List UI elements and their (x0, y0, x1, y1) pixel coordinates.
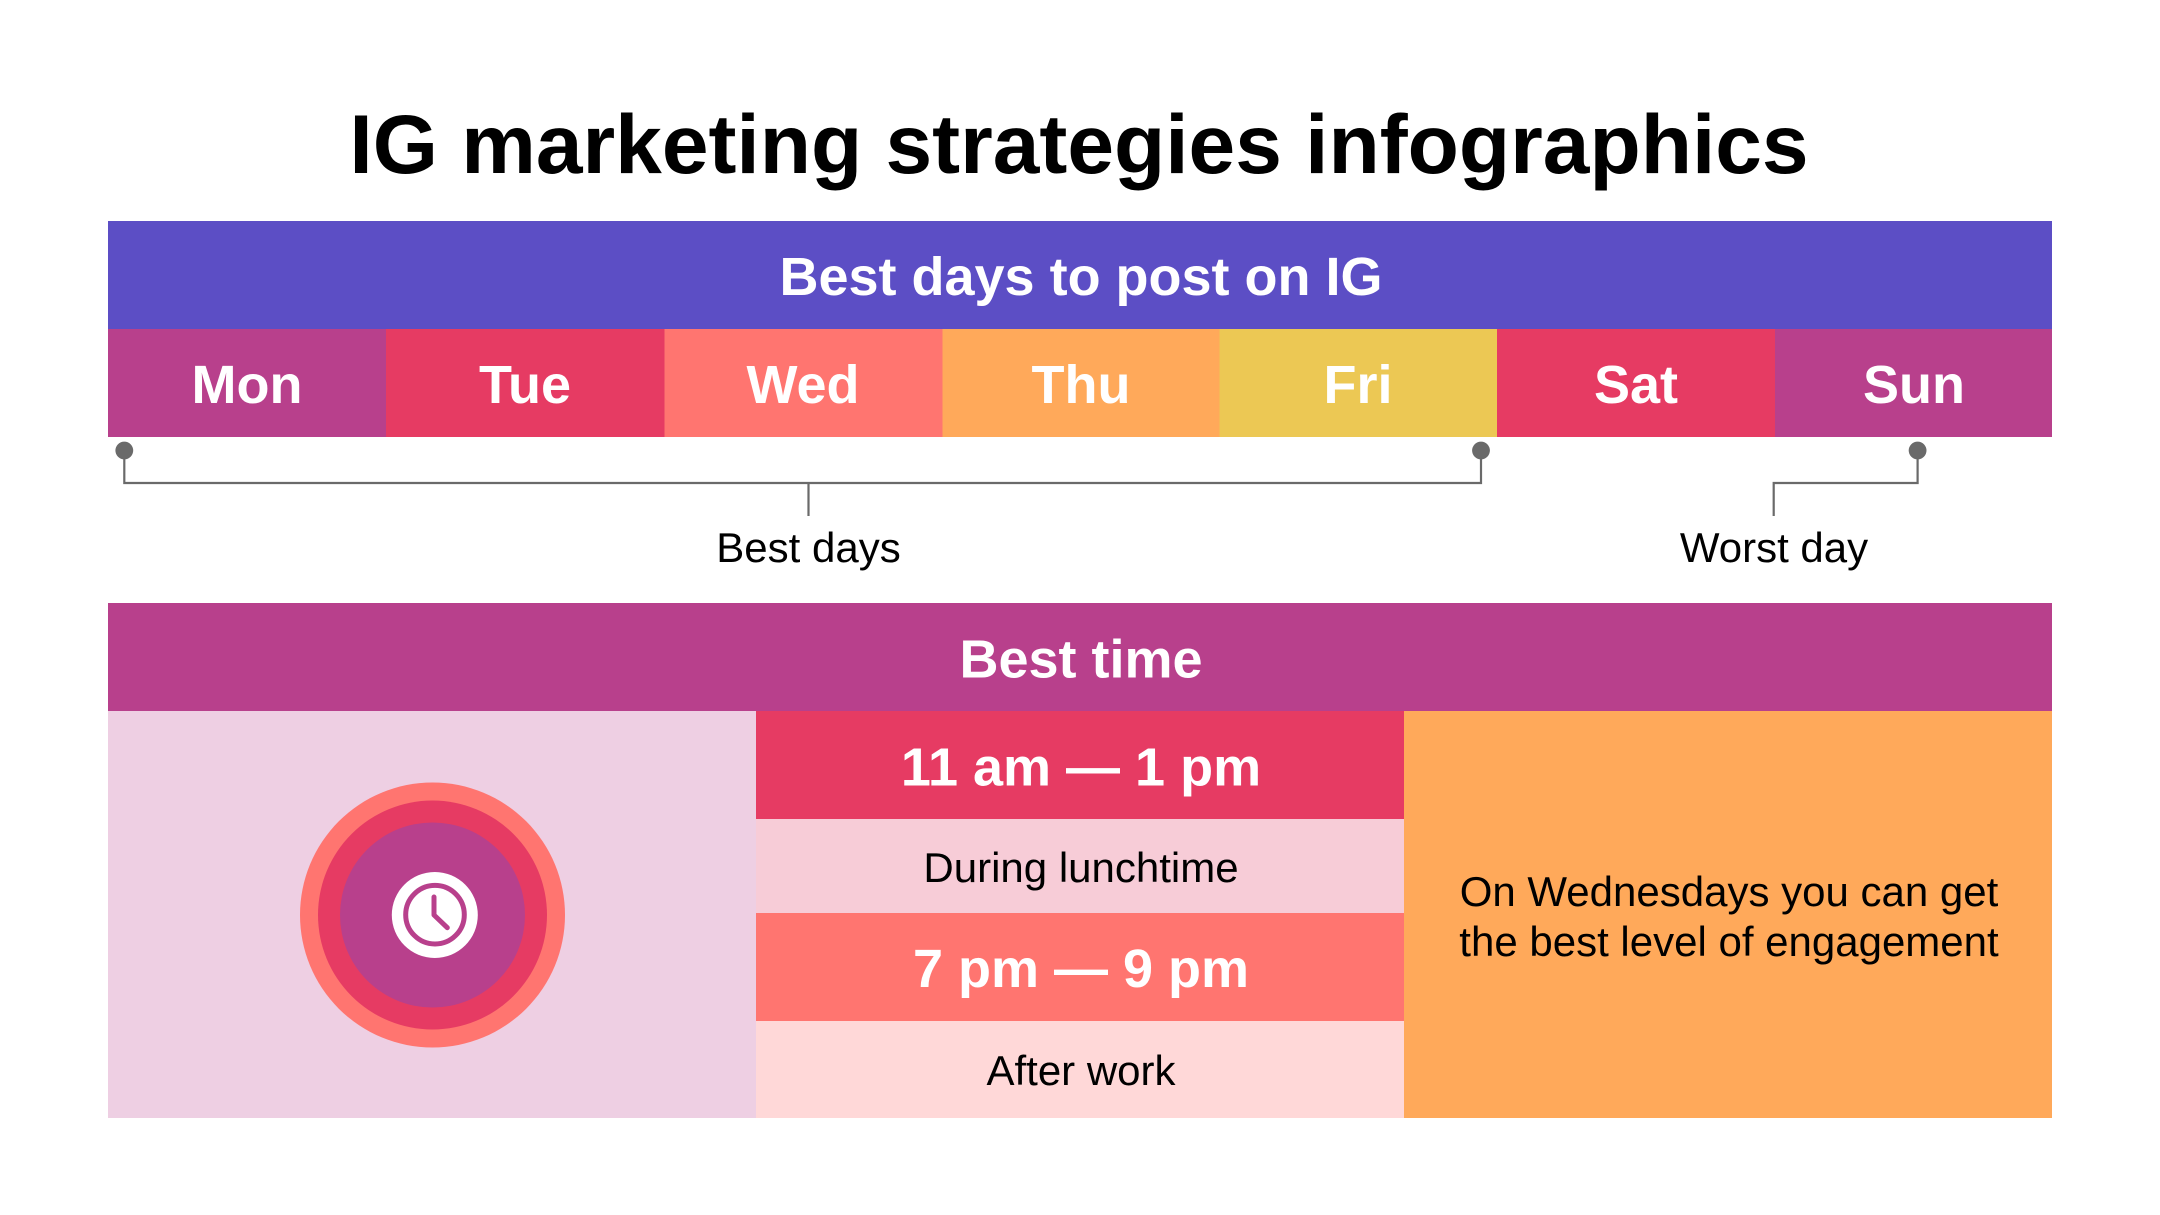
title: IG marketing strategies infographics (349, 97, 1809, 191)
icon: clock in concentric circles (300, 782, 565, 1048)
day: Mon (108, 329, 386, 437)
heading band: best days to post (108, 221, 2052, 329)
day: Wed (664, 329, 942, 437)
label: best days: Best days (716, 524, 901, 571)
panel: clock background (108, 711, 756, 1118)
day: Tue: Tue (479, 355, 571, 415)
note: after work (756, 1021, 1404, 1118)
bracket: best days (115, 442, 1490, 516)
callout: wednesday engagement (1404, 711, 2052, 1118)
label: worst day: Worst day (1680, 524, 1868, 571)
day: Thu: Thu (1032, 355, 1130, 415)
time block: 7 pm to 9 pm (756, 913, 1404, 1021)
callout: wednesday engagement: On Wednesdays you can get (1460, 868, 1999, 915)
heading band: best time: Best time (959, 630, 1203, 690)
day: Sat (1497, 329, 1775, 437)
day: Sat: Sat (1594, 355, 1678, 415)
note: during lunchtime: During lunchtime (923, 844, 1239, 891)
time block: 11 am to 1 pm (756, 711, 1404, 819)
note: during lunchtime (756, 819, 1404, 913)
note: after work: After work (986, 1047, 1177, 1094)
day: Wed: Wed (746, 355, 860, 415)
day: Fri (1220, 329, 1497, 437)
day: Sun: Sun (1863, 355, 1965, 415)
bracket: worst day (1774, 442, 1926, 516)
day: Mon: Mon (192, 355, 302, 415)
day: Sun (1775, 329, 2052, 437)
time block: 7 pm to 9 pm: 7 pm — 9 pm (913, 939, 1249, 999)
day: Fri: Fri (1323, 355, 1393, 415)
panel: best days (108, 221, 2052, 571)
time block: 11 am to 1 pm: 11 am — 1 pm (901, 738, 1261, 798)
heading band: best time (108, 603, 2052, 711)
day: Thu (942, 329, 1220, 437)
callout: wednesday engagement: the best level of engagement (1459, 918, 1999, 965)
heading band: best days to post: Best days to post on IG (779, 247, 1383, 307)
day: Tue (386, 329, 664, 437)
panel: best time (108, 603, 2052, 1118)
